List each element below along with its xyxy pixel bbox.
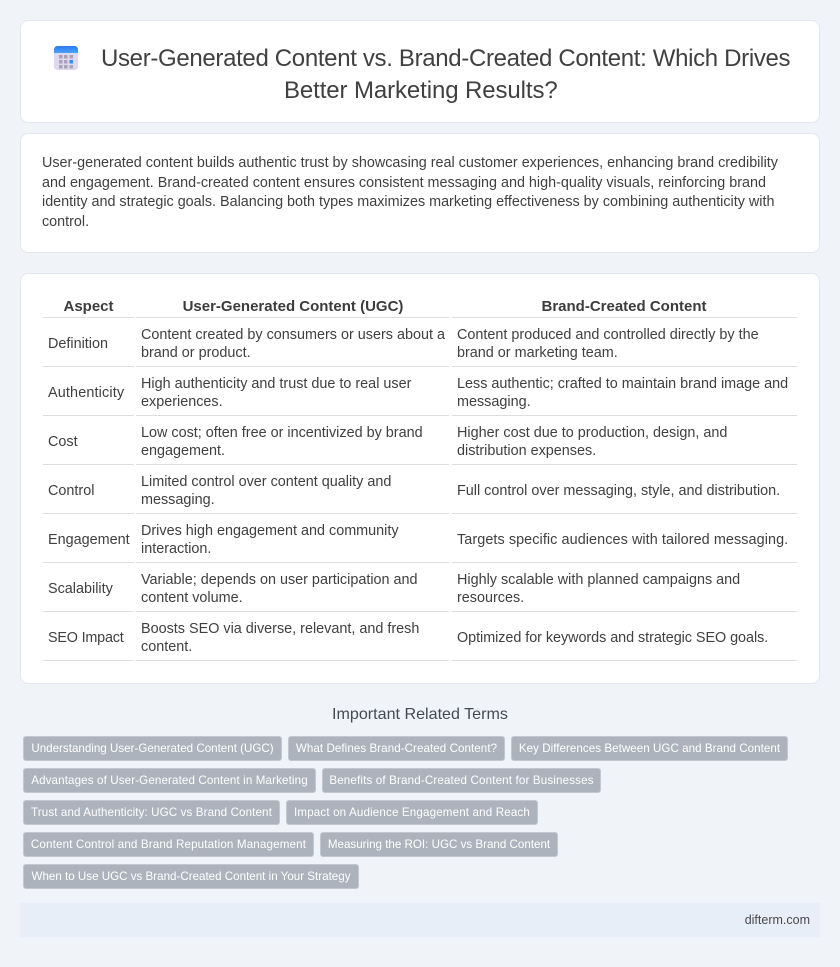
row: engagement bbox=[48, 523, 788, 557]
row: cost: Low cost; often free or incentivized by brand bbox=[141, 425, 423, 441]
row: cost: engagement. bbox=[141, 443, 225, 459]
tag: What Defines Brand-Created Content? bbox=[296, 742, 497, 755]
footer bar bbox=[20, 903, 820, 937]
tag: Trust and Authenticity: UGC vs Brand Content bbox=[31, 806, 272, 819]
row: scalability bbox=[48, 572, 740, 606]
row: authenticity: messaging. bbox=[457, 394, 531, 410]
row: SEO impact: Optimized for keywords and strategic SEO goals. bbox=[457, 630, 768, 646]
tag: Measuring the ROI: UGC vs Brand Content bbox=[328, 838, 550, 851]
row: cost: distribution expenses. bbox=[457, 443, 596, 459]
intro text card bbox=[20, 133, 820, 253]
row: control: Full control over messaging, style, and distribution. bbox=[457, 483, 780, 499]
intro paragraph bbox=[42, 155, 778, 230]
title: Better Marketing Results? bbox=[284, 77, 558, 104]
row: scalability: resources. bbox=[457, 590, 524, 606]
tag: Content Control and Brand Reputation Management bbox=[31, 838, 306, 851]
row: SEO impact: Boosts SEO via diverse, relevant, and fresh bbox=[141, 621, 419, 637]
row: definition: brand or marketing team. bbox=[457, 345, 618, 361]
tag bbox=[322, 768, 601, 793]
row: definition bbox=[48, 327, 759, 361]
row: cost bbox=[48, 425, 727, 459]
row: scalability: Variable; depends on user participation and bbox=[141, 572, 418, 588]
tag bbox=[320, 832, 558, 857]
icon: calendar bbox=[54, 46, 78, 70]
row: SEO impact: SEO Impact bbox=[48, 630, 124, 646]
tag: Advantages of User-Generated Content in Marketing bbox=[31, 774, 308, 787]
tag: Understanding User-Generated Content (UGC) bbox=[31, 742, 274, 755]
row: SEO impact bbox=[48, 621, 768, 655]
row: scalability: content volume. bbox=[141, 590, 243, 606]
tag: When to Use UGC vs Brand-Created Content in Your Strategy bbox=[32, 870, 350, 883]
tag bbox=[23, 768, 316, 793]
row: definition: Content created by consumers or users about a bbox=[141, 327, 445, 343]
tag bbox=[23, 864, 359, 889]
row: cost: Cost bbox=[48, 434, 78, 450]
tag bbox=[23, 800, 280, 825]
row: engagement: Drives high engagement and community bbox=[141, 523, 399, 539]
row: engagement: Engagement bbox=[48, 532, 130, 548]
tag bbox=[23, 832, 314, 857]
row: engagement: Targets specific audiences with tailored messaging. bbox=[457, 532, 788, 548]
table header: UGC: User-Generated Content (UGC) bbox=[183, 298, 403, 315]
related terms heading: Important Related Terms bbox=[332, 705, 508, 723]
row: SEO impact: content. bbox=[141, 639, 192, 655]
related terms tags bbox=[23, 736, 788, 889]
row: cost: Higher cost due to production, design, and bbox=[457, 425, 727, 441]
row: scalability: Highly scalable with planned campaigns and bbox=[457, 572, 740, 588]
intro paragraph: User-generated content builds authentic trust by showcasing real customer experiences, enhancing brand credibility bbox=[42, 155, 778, 171]
row: control: Limited control over content quality and bbox=[141, 474, 391, 490]
row: definition: brand or product. bbox=[141, 345, 251, 361]
table header: aspect: Aspect bbox=[63, 298, 114, 315]
row: authenticity bbox=[48, 376, 788, 410]
tag bbox=[511, 736, 788, 761]
row: control bbox=[48, 474, 780, 508]
intro paragraph: identity and strategic goals. Balancing both types maximizes marketing effectiveness by combining authenticity with bbox=[42, 194, 774, 210]
tag: Key Differences Between UGC and Brand Content bbox=[519, 742, 780, 755]
tag bbox=[23, 736, 282, 761]
title: User-Generated Content vs. Brand-Created Content: Which Drives bbox=[101, 45, 790, 72]
tag bbox=[286, 800, 538, 825]
tag bbox=[288, 736, 505, 761]
row: authenticity: High authenticity and trust due to real user bbox=[141, 376, 411, 392]
footer source: difterm.com bbox=[745, 913, 810, 927]
row: definition: Content produced and controlled directly by the bbox=[457, 327, 759, 343]
row: authenticity: Less authentic; crafted to maintain brand image and bbox=[457, 376, 788, 392]
row: authenticity: Authenticity bbox=[48, 385, 124, 401]
row: definition: Definition bbox=[48, 336, 108, 352]
tag: Impact on Audience Engagement and Reach bbox=[294, 806, 530, 819]
title bbox=[101, 45, 790, 104]
intro paragraph: and engagement. Brand-created content ensures consistent messaging and high-quality visuals, reinforcing brand bbox=[42, 175, 766, 191]
row: scalability: Scalability bbox=[48, 581, 113, 597]
tag: Benefits of Brand-Created Content for Businesses bbox=[329, 774, 594, 787]
row: authenticity: experiences. bbox=[141, 394, 223, 410]
row: engagement: interaction. bbox=[141, 541, 211, 557]
title card bbox=[20, 20, 820, 123]
intro paragraph: control. bbox=[42, 214, 89, 230]
table header: brand: Brand-Created Content bbox=[541, 298, 706, 315]
comparison table card bbox=[20, 273, 820, 684]
row: control: Control bbox=[48, 483, 94, 499]
row: control: messaging. bbox=[141, 492, 215, 508]
